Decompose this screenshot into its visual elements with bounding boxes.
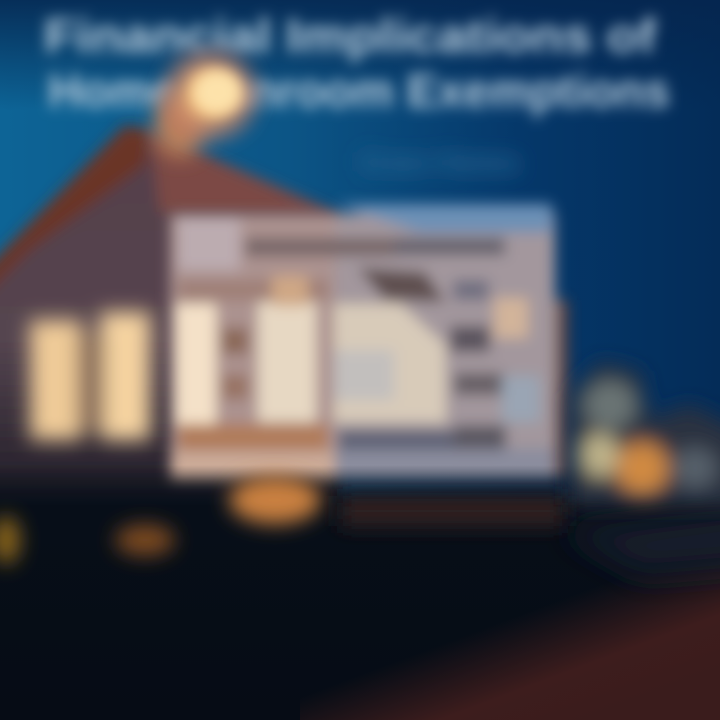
right column dark panels xyxy=(450,326,490,352)
glowing left windows xyxy=(30,312,150,440)
facade bottom left band xyxy=(172,452,334,482)
title line 1: Financial Implications of xyxy=(44,9,656,62)
glowing lamp on the roof xyxy=(152,39,268,157)
low garden lights xyxy=(0,496,565,564)
orange floor band xyxy=(178,424,328,450)
facade warm left half xyxy=(170,214,335,482)
facade bottom right band xyxy=(335,448,553,482)
title xyxy=(44,9,670,117)
right dark edge xyxy=(555,300,568,480)
grey lower right band xyxy=(338,430,503,450)
facade base xyxy=(170,214,555,482)
dark foreground ground xyxy=(0,465,720,720)
right warm glow xyxy=(494,298,528,338)
wall xyxy=(0,135,340,510)
small brown panels xyxy=(222,328,248,354)
subtitle, faint: Green Homes xyxy=(360,146,520,179)
orange porch glow xyxy=(229,476,321,524)
right column blue panels xyxy=(502,376,540,422)
house left gable wall and roof xyxy=(0,125,340,510)
title line 2: Home Sunroom Exemptions xyxy=(48,64,670,117)
facade upper blue xyxy=(335,204,552,232)
lamp halo xyxy=(152,39,268,151)
upper left pale panel xyxy=(178,218,240,270)
pale windows xyxy=(176,304,216,424)
lamp core xyxy=(194,70,242,114)
far ground at right xyxy=(560,505,720,575)
road xyxy=(300,540,720,720)
upper dark stripe xyxy=(245,238,395,256)
lamp glow trail xyxy=(154,93,206,157)
roof slope xyxy=(150,130,335,212)
diagonal dark stripe xyxy=(358,268,445,302)
band above windows xyxy=(178,280,328,300)
neighbouring houses at right xyxy=(570,362,720,505)
roof edge xyxy=(0,125,150,320)
main building facade xyxy=(170,204,568,482)
